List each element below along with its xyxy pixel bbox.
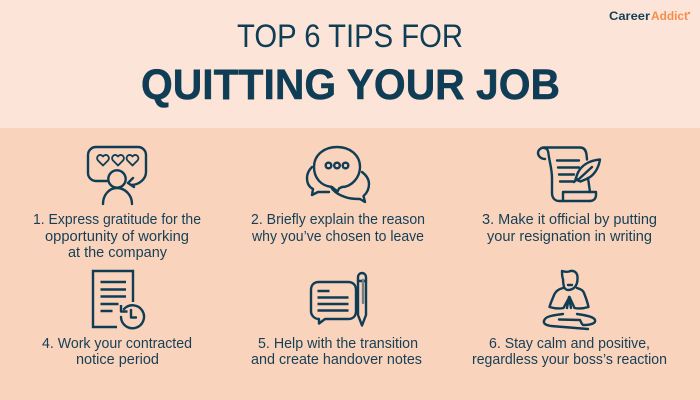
logo bbox=[609, 11, 690, 23]
header band bbox=[0, 0, 700, 128]
title line 2: QUITTING YOUR JOB bbox=[141, 61, 560, 109]
icon: scroll and quill bbox=[538, 148, 600, 201]
tip 3 text: 3. Make it official by putting bbox=[482, 212, 657, 228]
tip 6 bbox=[472, 271, 667, 368]
tip 1 text bbox=[33, 212, 201, 261]
tip 4 text: 4. Work your contracted bbox=[42, 336, 192, 352]
icon: meditating person bbox=[544, 271, 595, 329]
tip 5 text bbox=[251, 336, 422, 368]
icon: person with hearts speech bubble bbox=[88, 147, 146, 204]
tip 5 bbox=[251, 273, 422, 368]
tip 6 text: 6. Stay calm and positive, bbox=[489, 336, 650, 352]
tip 2 bbox=[251, 147, 425, 245]
tip 6 text: regardless your boss’s reaction bbox=[472, 352, 667, 368]
tip 5 text: 5. Help with the transition bbox=[258, 336, 418, 352]
tip 4 bbox=[42, 271, 192, 368]
tip 1 text: at the company bbox=[68, 245, 168, 261]
title line 1: TOP 6 TIPS FOR bbox=[237, 18, 463, 54]
icon: chat bubbles bbox=[307, 147, 369, 202]
tip 6 text bbox=[472, 336, 667, 368]
logo: Addict bbox=[651, 11, 688, 23]
tip 1 bbox=[33, 147, 201, 261]
body band bbox=[0, 128, 700, 400]
tip 1 text: opportunity of working bbox=[45, 229, 189, 245]
logo: Career bbox=[609, 11, 651, 23]
tip 4 text bbox=[42, 336, 192, 368]
tip 4 text: notice period bbox=[76, 352, 159, 368]
tip 1 text: 1. Express gratitude for the bbox=[33, 212, 201, 228]
tip 2 text: 2. Briefly explain the reason bbox=[251, 212, 425, 228]
tip 2 text: why you’ve chosen to leave bbox=[251, 229, 424, 245]
tip 3 text: your resignation in writing bbox=[487, 229, 652, 245]
tip 5 text: and create handover notes bbox=[251, 352, 422, 368]
tip 2 text bbox=[251, 212, 425, 245]
icon: note bubble and pen bbox=[311, 273, 366, 326]
icon: document and clock bbox=[93, 271, 144, 328]
tip 3 text bbox=[482, 212, 657, 245]
tip 3 bbox=[482, 148, 657, 245]
